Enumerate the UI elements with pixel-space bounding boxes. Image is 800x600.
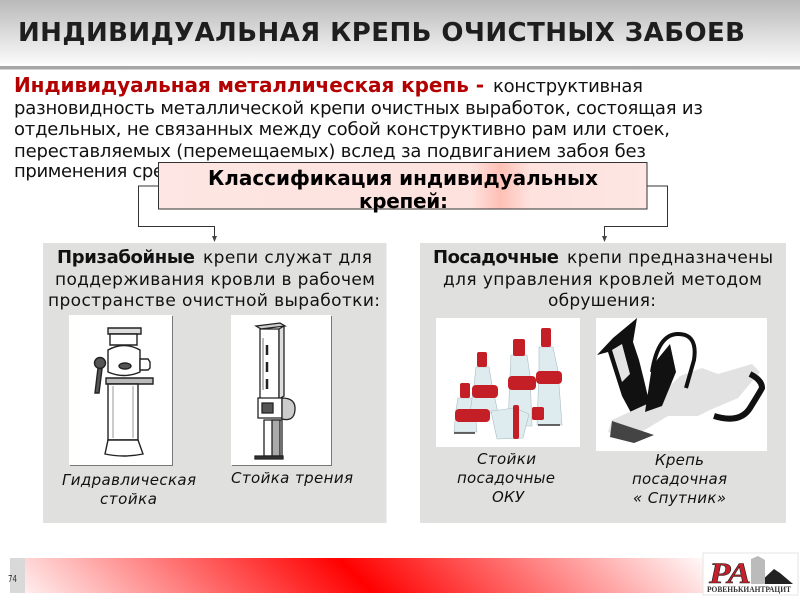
panel heading: face supports: поддерживания кровли в рабочем bbox=[55, 270, 375, 290]
classification box bbox=[158, 162, 647, 213]
caption: hydraulic prop: Гидравлическая bbox=[62, 471, 196, 489]
caption: OKU props: Стойки bbox=[477, 450, 536, 468]
caption: friction prop: Стойка трения bbox=[231, 469, 353, 487]
definition text block: конструктивная bbox=[493, 76, 643, 97]
image: hydraulic prop bbox=[69, 315, 173, 466]
definition text block: Индивидуальная металлическая крепь - bbox=[14, 73, 484, 97]
definition text block: разновидность металлической крепи очистных выработок, состоящая из bbox=[14, 98, 703, 119]
classification heading bbox=[208, 166, 598, 213]
image: Sputnik support bbox=[596, 318, 767, 451]
panel heading: caving supports: для управления кровлей методом bbox=[443, 270, 762, 290]
image: OKU props bbox=[436, 318, 580, 447]
panel: face supports bbox=[43, 243, 386, 523]
footer bar bbox=[8, 558, 703, 593]
caption: hydraulic prop: стойка bbox=[100, 490, 157, 508]
caption: Sputnik support bbox=[632, 451, 727, 507]
logo: РОВЕНЬКИАНТРАЦИТ bbox=[707, 585, 792, 594]
classification heading: крепей: bbox=[359, 189, 448, 213]
panel heading: face supports: Призабойные bbox=[57, 247, 195, 268]
panel heading: face supports bbox=[48, 247, 380, 311]
panel heading: caving supports: Посадочные bbox=[433, 247, 559, 268]
image: friction prop bbox=[231, 315, 332, 466]
caption: Sputnik support: « Спутник» bbox=[633, 489, 726, 507]
definition text block: переставляемых (перемещаемых) вслед за подвиганием забоя без bbox=[14, 141, 646, 162]
caption: OKU props: посадочные bbox=[457, 469, 555, 487]
slide number: 74 bbox=[8, 574, 17, 585]
definition text block bbox=[14, 73, 703, 182]
logo bbox=[703, 553, 798, 595]
connector arrow: left bbox=[138, 186, 217, 242]
panel heading: face supports: крепи служат для bbox=[203, 248, 372, 268]
definition text block: отдельных, не связанных между собой конструктивно рам или стоек, bbox=[14, 119, 670, 140]
caption: OKU props bbox=[457, 450, 555, 506]
title band bbox=[0, 0, 800, 70]
panel heading: caving supports: крепи предназначены bbox=[567, 248, 773, 268]
caption: Sputnik support: Крепь bbox=[655, 451, 704, 469]
caption: Sputnik support: посадочная bbox=[632, 470, 727, 488]
connector arrow: right bbox=[602, 186, 668, 242]
caption: OKU props: ОКУ bbox=[492, 488, 525, 506]
classification heading: Классификация индивидуальных bbox=[208, 166, 598, 190]
panel: caving supports bbox=[420, 243, 786, 523]
definition text block: применения сре bbox=[14, 161, 164, 182]
panel heading: face supports: пространстве очистной выработки: bbox=[48, 291, 380, 311]
panel heading: caving supports bbox=[433, 247, 773, 311]
caption: hydraulic prop bbox=[62, 471, 196, 508]
panel heading: caving supports: обрушения: bbox=[548, 291, 656, 311]
title: ИНДИВИДУАЛЬНАЯ КРЕПЬ ОЧИСТНЫХ ЗАБОЕВ bbox=[18, 18, 745, 48]
logo: РА bbox=[708, 557, 751, 590]
